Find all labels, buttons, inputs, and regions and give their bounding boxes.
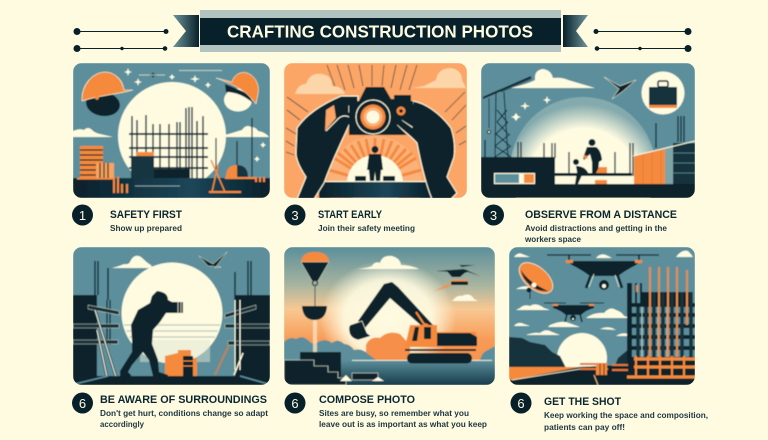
tracks <box>407 353 472 364</box>
cloud <box>112 256 152 268</box>
standing worker <box>583 139 602 173</box>
blimp <box>514 257 558 299</box>
teal clouds <box>284 337 495 360</box>
right building and scaffold <box>215 261 270 385</box>
text: be aware of surroundings: accordingly <box>100 419 144 429</box>
text: compose photo: leave out is as important as what you keep <box>319 419 487 429</box>
text: start early: START EARLY <box>318 209 382 221</box>
panel: observe from a distance <box>481 63 695 198</box>
number badge 1: 1 <box>79 208 86 223</box>
briefcase circle <box>642 72 684 114</box>
trees <box>509 337 630 368</box>
panel: safety first <box>73 63 270 198</box>
text: get the shot: Keep working the space and composition, <box>544 410 708 420</box>
excavator <box>349 282 477 364</box>
orange stacks <box>77 146 127 193</box>
lens <box>356 100 390 134</box>
big drone <box>547 255 659 290</box>
boxes <box>355 176 395 182</box>
text: safety first: Show up prepared <box>110 223 182 233</box>
decorative connector lines left <box>74 28 168 52</box>
plane <box>604 77 636 99</box>
barrier segments <box>580 364 628 370</box>
sun <box>122 262 222 364</box>
sun <box>557 333 607 383</box>
bird <box>199 252 227 268</box>
camera <box>349 87 413 135</box>
building <box>627 283 695 361</box>
body <box>405 325 476 347</box>
text: be aware of surroundings: BE AWARE OF SURROUNDINGS <box>100 394 268 406</box>
stars <box>124 68 266 162</box>
text: observe from a distance: OBSERVE FROM A DISTANCE <box>525 209 678 221</box>
decorative connector lines right <box>594 28 691 52</box>
top cloud <box>357 256 478 301</box>
block building <box>131 156 154 180</box>
text: start early: Join their safety meeting <box>318 223 415 233</box>
text: get the shot <box>544 396 708 432</box>
text: be aware of surroundings: Don't get hurt, conditions change so adapt <box>100 408 268 418</box>
cloud <box>510 69 595 88</box>
crane <box>483 77 531 157</box>
worker silhouette <box>367 146 383 182</box>
orange cloud <box>366 333 410 360</box>
number badge 3 second: 3 <box>490 208 497 223</box>
beam <box>551 173 632 176</box>
site poles <box>485 116 684 176</box>
boom <box>358 282 433 328</box>
text: get the shot: GET THE SHOT <box>544 396 621 408</box>
title banner <box>173 10 588 52</box>
text: compose photo <box>319 394 487 429</box>
number badge 6 <box>72 392 93 414</box>
right hand <box>397 101 457 199</box>
scaffold <box>129 107 208 178</box>
hanging load <box>301 252 329 352</box>
left building and scaffold <box>73 261 119 385</box>
ground <box>319 182 432 198</box>
text: start early <box>318 209 415 233</box>
panel: get the shot <box>509 247 695 385</box>
number badge 6: 6 <box>79 396 86 411</box>
ground and road <box>509 357 695 385</box>
orange poles <box>637 267 687 357</box>
text: observe from a distance <box>524 209 678 244</box>
right site with dome and poles <box>209 118 264 193</box>
glow <box>320 260 456 376</box>
rays <box>286 65 466 155</box>
clouds <box>73 126 269 137</box>
crouching worker <box>573 159 589 184</box>
ground <box>554 183 695 198</box>
text: compose photo: COMPOSE PHOTO <box>319 394 415 406</box>
text: safety first <box>110 209 182 233</box>
left building <box>481 156 556 185</box>
photographer <box>120 291 183 376</box>
panel: compose photo <box>284 247 495 385</box>
number badge 3 second <box>483 204 504 226</box>
orange blocks <box>165 350 197 376</box>
left hand <box>296 96 358 199</box>
text: safety first: SAFETY FIRST <box>110 209 182 221</box>
number badge 6 second: 6 <box>291 396 299 411</box>
ground <box>73 376 270 385</box>
title: CRAFTING CONSTRUCTION PHOTOS <box>227 22 533 42</box>
drone <box>434 265 480 291</box>
small drone <box>544 303 604 322</box>
text: be aware of surroundings <box>100 394 268 429</box>
right building <box>633 141 695 190</box>
number badge 6 second <box>284 392 306 414</box>
number badge 6 third <box>510 392 532 414</box>
clouds <box>295 68 466 94</box>
text: observe from a distance: Avoid distractions and getting in the <box>525 223 667 233</box>
number badge 3: 3 <box>291 208 299 223</box>
ribbon tail left <box>173 15 199 47</box>
orange parts <box>583 154 607 184</box>
clouds <box>514 251 693 336</box>
steps <box>284 352 384 385</box>
water <box>284 360 495 385</box>
orange fence <box>627 356 695 378</box>
number badge 1 <box>72 204 93 226</box>
sunburst <box>328 136 422 198</box>
stars <box>511 96 551 121</box>
text: observe from a distance: workers space <box>524 234 581 244</box>
text: get the shot: patients can pay off! <box>544 422 625 432</box>
dome <box>510 96 654 198</box>
bucket <box>349 321 371 340</box>
sun <box>118 82 226 190</box>
panel: be aware of surroundings <box>73 247 270 385</box>
text: compose photo: Sites are busy, so remember what you <box>319 408 469 418</box>
helmet left <box>82 72 133 118</box>
panel: start early <box>284 63 467 198</box>
number badge 6 third: 6 <box>517 396 525 411</box>
ribbon tail right <box>563 15 588 47</box>
helmet right <box>216 72 259 112</box>
stack <box>183 356 193 378</box>
number badge 3 <box>284 204 306 226</box>
ground <box>73 178 270 198</box>
